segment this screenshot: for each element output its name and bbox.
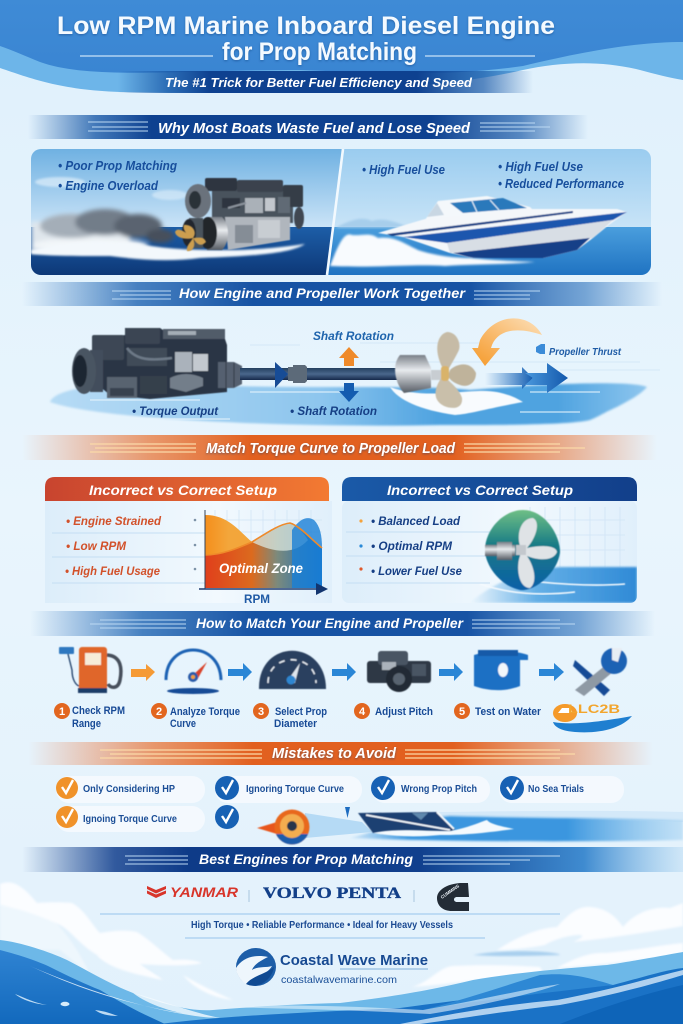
logo: volvo penta: VOLVO PENTA [263, 885, 402, 902]
item: ignoring torque curve [215, 776, 362, 803]
wake foam [373, 820, 514, 836]
clouds left lower [97, 955, 233, 1000]
diagonal divider [327, 149, 343, 275]
header bar [45, 477, 329, 501]
logo: cummins [437, 883, 469, 911]
step 4: Adjust Pitch [375, 706, 433, 718]
step 1: Range [72, 718, 101, 730]
title: Low RPM Marine Inboard Diesel Engine [57, 12, 555, 40]
item: only considering HP: Only Considering HP [83, 783, 175, 795]
foam ribbon lower right [400, 970, 683, 1024]
arrow [539, 663, 564, 681]
panel: incorrect setup [45, 477, 332, 606]
foam [31, 242, 305, 260]
propeller blades [431, 332, 476, 408]
step 1: 1 [59, 706, 65, 718]
foam ribbons right [200, 984, 560, 1014]
curved rotation arrow [472, 318, 542, 366]
arrow [439, 663, 463, 681]
foam [390, 387, 523, 415]
brand name: Coastal Wave Marine [280, 952, 428, 969]
panel: problem photos [31, 149, 651, 275]
clouds right upper [497, 903, 683, 950]
icon: wave logo [236, 948, 276, 986]
list: • Engine Strained [66, 514, 162, 528]
label: propeller thrust: Propeller Thrust [549, 346, 621, 358]
bearing housing [395, 355, 431, 393]
foam ribbon left [30, 966, 220, 1018]
propeller: gold [175, 225, 206, 251]
panel labels: • Poor Prop Matching [58, 159, 177, 173]
water pool [50, 383, 647, 426]
section heading: how engine and propeller work: How Engine and Propeller Work Together [179, 285, 467, 301]
icon: blue housing [474, 650, 528, 690]
step 1: Check RPM [72, 705, 125, 717]
step 3: 3 [258, 706, 264, 718]
list: • Optimal RPM [371, 539, 453, 553]
header bar [342, 477, 637, 501]
chart: torque curve: Optimal Zone [219, 560, 303, 576]
arrow [228, 663, 252, 681]
item: ignoring torque curve: Ignoring Torque Curve [246, 783, 344, 795]
clouds right lower [557, 943, 683, 968]
section heading: match torque curve: Match Torque Curve to Propeller Load [206, 441, 456, 457]
sea: deep blue left [0, 950, 165, 1024]
boat scene strip [257, 807, 683, 844]
label: shaft rotation top: Shaft Rotation [313, 329, 394, 343]
title side rules [80, 55, 535, 57]
title [57, 12, 555, 66]
icon: tools [573, 648, 627, 696]
section heading: mistakes to avoid [28, 742, 653, 765]
panel labels: • High Fuel Use [362, 163, 445, 177]
step 3: Diameter [274, 718, 318, 730]
light beam [305, 813, 372, 838]
bottom waves and clouds [0, 882, 683, 1024]
section heading: how to match [30, 611, 655, 636]
logo: yanmar [147, 884, 239, 900]
engine: overloaded [182, 178, 304, 250]
right scene background [337, 149, 651, 227]
engine [72, 328, 242, 399]
spray [330, 234, 535, 267]
section heading: why boats waste fuel: Why Most Boats Waste Fuel and Lose Speed [158, 121, 471, 137]
dial badge [257, 810, 310, 844]
website: coastalwavemarine.com [281, 974, 397, 986]
step 4 [354, 703, 433, 719]
item: no sea trials [499, 776, 624, 803]
flag marker [345, 807, 350, 818]
clouds left [0, 882, 202, 980]
panel labels: • Engine Overload [58, 179, 158, 193]
sea: deep blue lower [160, 968, 683, 1024]
section heading: why boats waste fuel [28, 115, 588, 139]
step 5: 5 [459, 706, 465, 718]
panel: correct setup [336, 477, 637, 603]
panel labels: • Reduced Performance [498, 177, 624, 191]
panel labels [58, 159, 624, 193]
section heading: how engine and propeller work [22, 282, 662, 306]
subtitle banner: The #1 Trick for Better Fuel Efficiency and Speed [165, 75, 473, 90]
arrow up [339, 347, 359, 366]
left scene background [31, 149, 346, 275]
icon: engine [367, 651, 431, 692]
title: for Prop Matching [222, 38, 417, 66]
thrust arrows [485, 363, 568, 393]
brand logos [147, 883, 469, 911]
pale cloud right [473, 951, 560, 956]
distant hills [335, 219, 410, 228]
water highlights [90, 392, 600, 419]
arrow [332, 663, 356, 681]
list: • Low RPM [66, 539, 127, 553]
coupling [288, 365, 307, 383]
item: no sea trials: No Sea Trials [528, 783, 584, 795]
step 5: Test on Water [475, 706, 542, 718]
shaft direction arrow [275, 362, 288, 388]
foam specks [15, 994, 118, 1016]
section heading: match torque curve [22, 435, 657, 460]
brand footer [236, 948, 428, 986]
section heading: best engines [22, 847, 683, 872]
item: wrong prop pitch [371, 776, 490, 803]
list [346, 514, 490, 583]
pale cloud bands left [0, 905, 90, 975]
icon: thumb [536, 344, 545, 354]
arrow [131, 664, 155, 681]
boat [378, 196, 627, 258]
header text: Incorrect vs Correct Setup [89, 482, 277, 498]
step 5 [454, 703, 542, 719]
subtitle banner [118, 71, 533, 93]
item: ignoing torque curve: Ignoing Torque Curve [83, 813, 177, 825]
foam oval [60, 1002, 70, 1006]
arrow down [339, 383, 359, 402]
chart: torque curve [199, 510, 328, 606]
cloud near footer [412, 965, 543, 987]
step 4: 4 [359, 706, 366, 718]
steps row [54, 647, 632, 732]
step 1 [54, 703, 125, 730]
item: empty check [215, 805, 239, 829]
logo: cummins: CUMMINS [440, 883, 460, 900]
background streaks [250, 343, 660, 370]
logo: boat badge: LLC2B [568, 702, 620, 716]
sea: light band [0, 940, 683, 1024]
right sea [327, 227, 651, 275]
list: • Lower Fuel Use [371, 564, 462, 578]
section heading: mistakes to avoid: Mistakes to Avoid [272, 746, 397, 762]
header text: Incorrect vs Correct Setup [387, 482, 573, 498]
item: wrong prop pitch: Wrong Prop Pitch [401, 783, 477, 795]
label: torque output: • Torque Output [132, 404, 219, 418]
list [52, 514, 205, 583]
section heading: how to match: How to Match Your Engine and Propeller [196, 615, 465, 631]
diagram: engine to propeller [50, 318, 660, 426]
icon: dial gauge [259, 651, 326, 689]
icon: propeller badge [485, 510, 560, 590]
mistakes checklist [56, 776, 624, 832]
logo: yanmar: YANMAR [170, 884, 239, 900]
sea: mid blue wedge [423, 974, 613, 1010]
speed boat [358, 812, 455, 833]
list: • Balanced Load [371, 514, 461, 528]
item: only considering HP [56, 776, 205, 803]
sea streak [350, 816, 683, 841]
logo: boat badge [553, 702, 632, 732]
divider rules [100, 914, 560, 938]
step 2: Analyze Torque [170, 706, 240, 718]
step 2 [151, 703, 240, 730]
chart: torque curve: RPM [244, 594, 270, 606]
label: shaft rotation bottom: • Shaft Rotation [290, 404, 377, 418]
shaft [240, 368, 400, 380]
header wave background [0, 0, 683, 93]
step 3 [253, 703, 327, 730]
step 2: Curve [170, 718, 196, 730]
step 2: 2 [156, 706, 162, 718]
section heading: best engines: Best Engines for Prop Matching [199, 851, 413, 867]
panel labels: • High Fuel Use [498, 160, 583, 174]
step 3: Select Prop [275, 706, 327, 718]
item: ignoing torque curve [56, 806, 205, 832]
benefit line: High Torque • Reliable Performance • Ideal for Heavy Vessels [191, 920, 453, 931]
deep corner [560, 985, 683, 1024]
list: • High Fuel Usage [65, 564, 160, 578]
pale upper sky wash [437, 811, 683, 822]
icon: fuel pump [59, 647, 121, 693]
smoke plume [31, 209, 174, 252]
icon: torque gauge [166, 650, 221, 694]
